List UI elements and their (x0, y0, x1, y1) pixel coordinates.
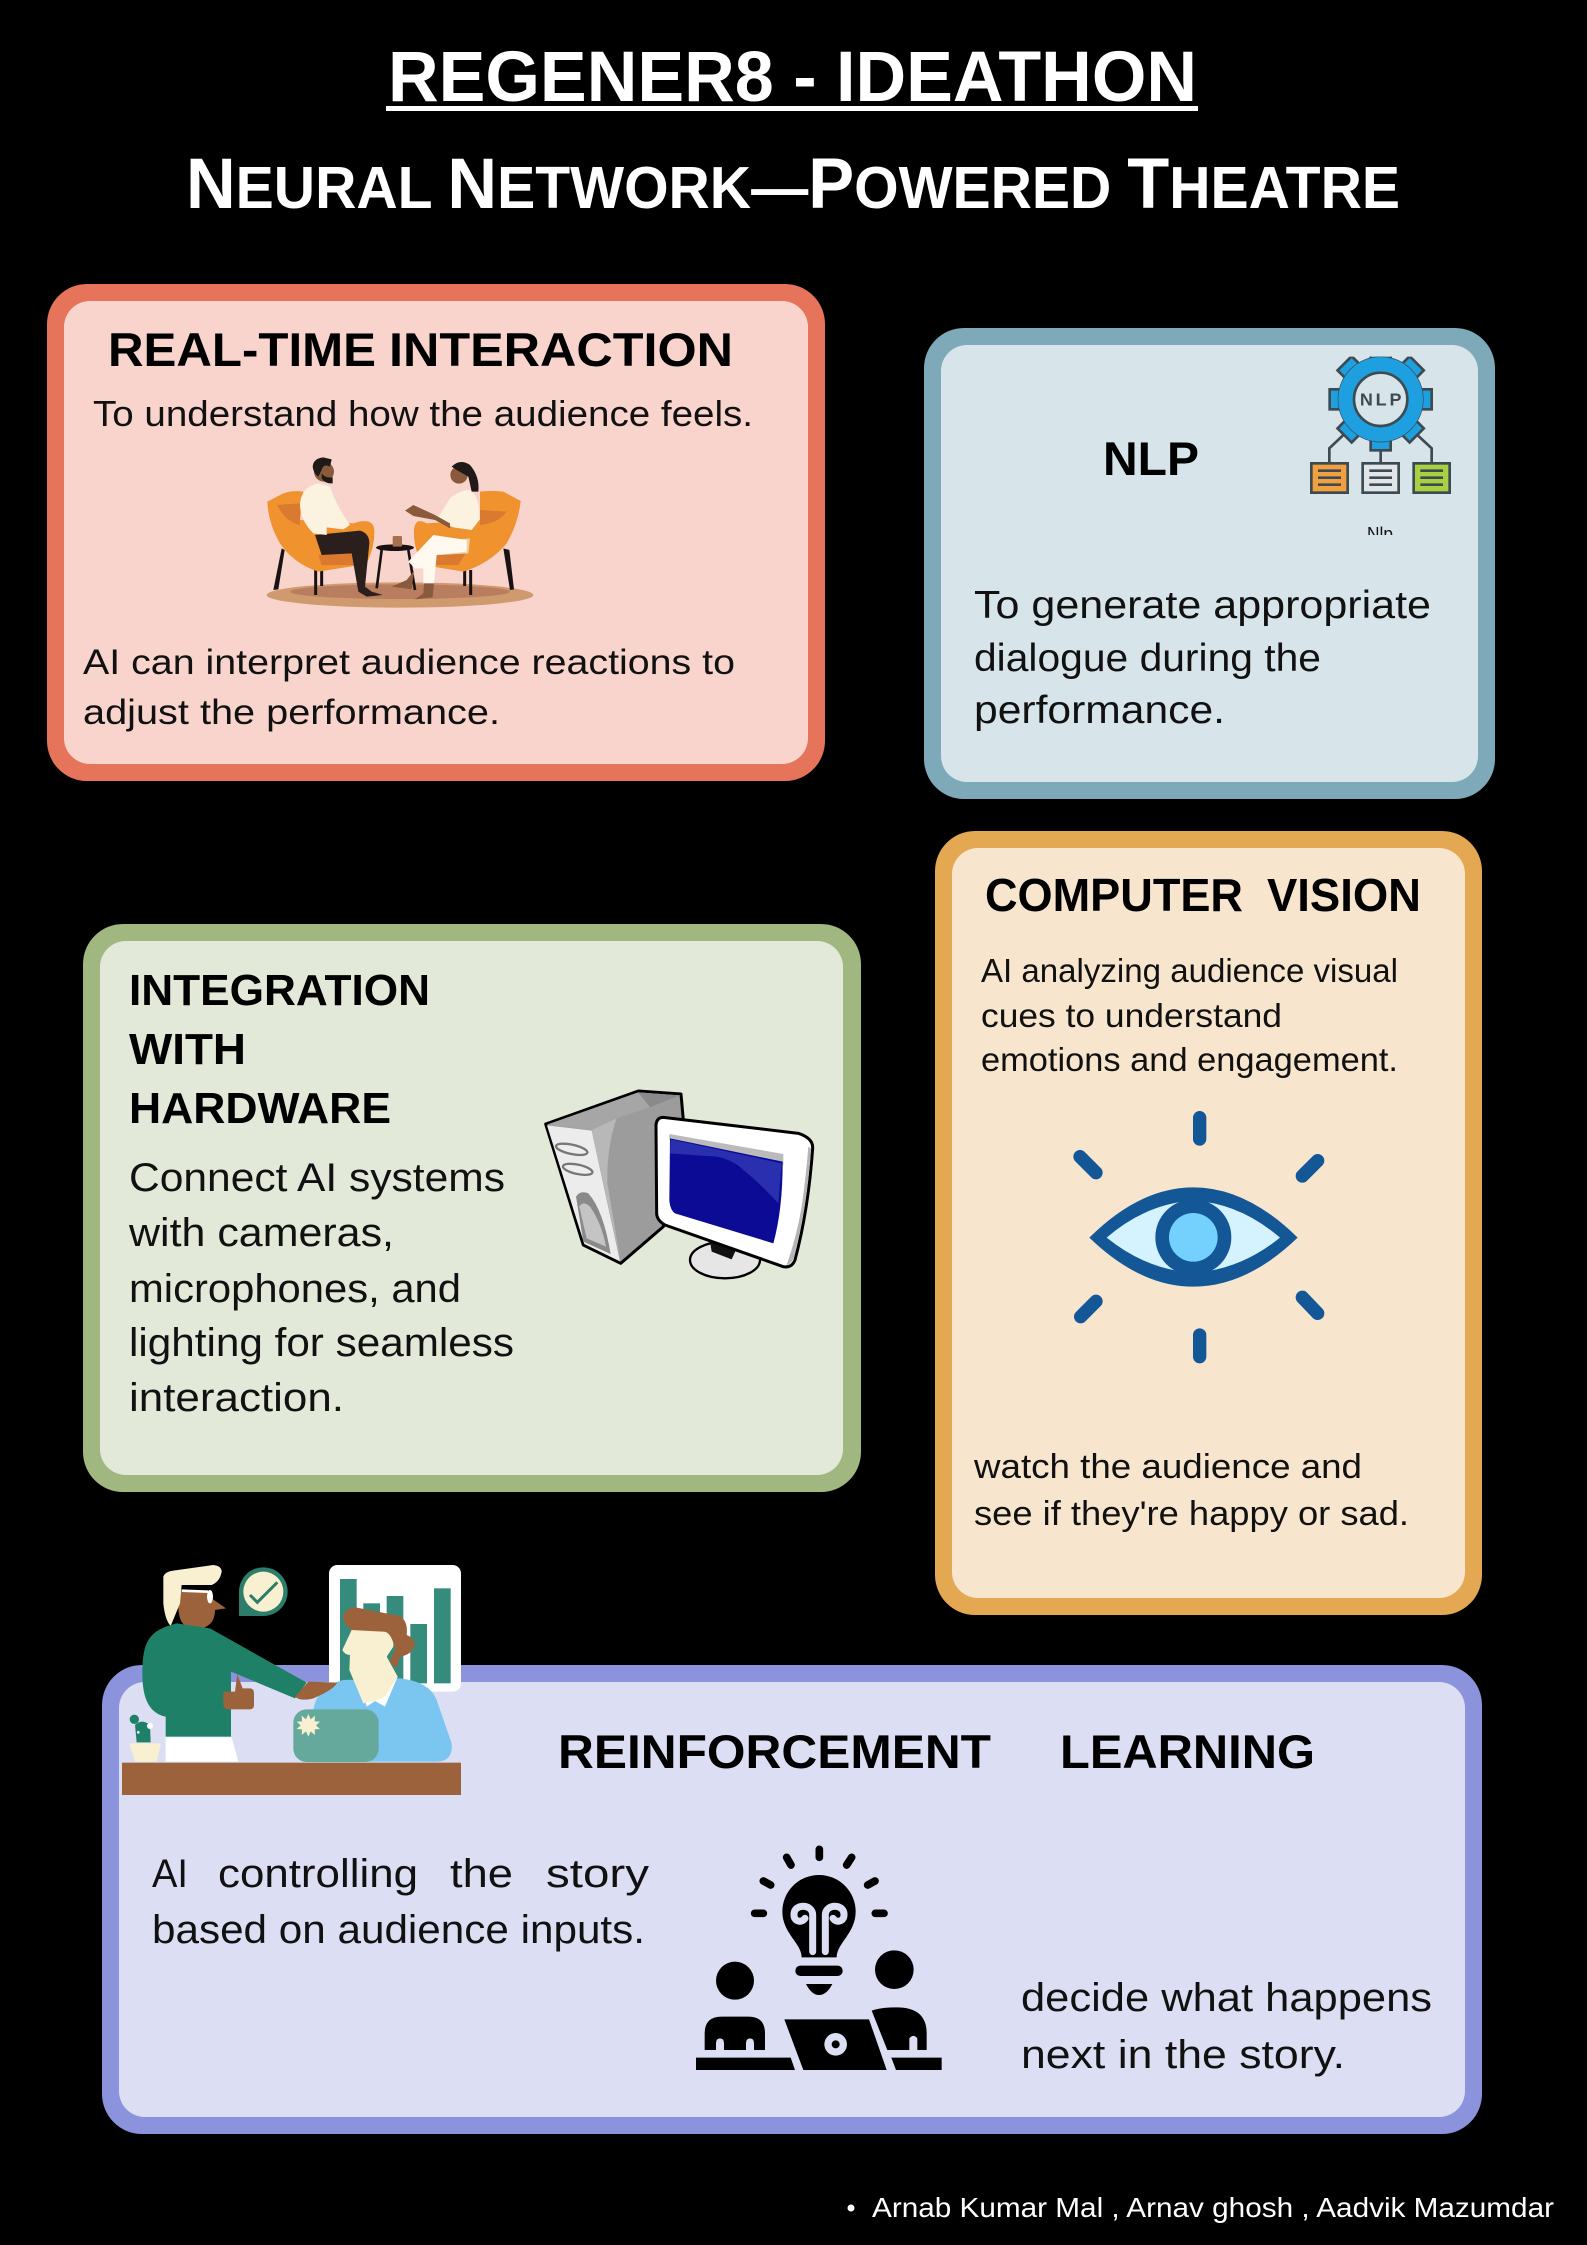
icon: lightbulb over team at laptop (696, 1849, 942, 2070)
text: hardware description: microphones, and (129, 1267, 461, 1311)
text: computer vision description: emotions and engagement. (981, 1041, 1398, 1078)
text: computer vision summary: watch the audience and (973, 1448, 1362, 1486)
illustration: two people talking (267, 457, 533, 608)
text: hardware description: interaction. (129, 1376, 344, 1420)
heading: reinforcement learning (558, 1725, 1315, 1778)
heading: real-time interaction: INTERACTION (389, 323, 733, 376)
icon: NLP gear (1311, 348, 1450, 493)
heading: real-time interaction: REAL-TIME (108, 323, 376, 376)
text: explanation: AI can interpret audience reactions to (83, 643, 735, 682)
heading: integration with hardware: WITH (129, 1025, 246, 1074)
panel: NLP (924, 328, 1495, 799)
text: explanation: adjust the performance. (83, 693, 500, 732)
text: purpose: To understand how the audience feels. (93, 393, 753, 434)
text: NLP description: performance. (974, 689, 1225, 732)
text: hardware description: Connect AI systems (129, 1156, 505, 1200)
icon: NLP gear: NLP (1360, 390, 1401, 410)
text: reinforcement description (152, 1852, 649, 1952)
text: reinforcement summary: decide what happens (1021, 1976, 1432, 2020)
heading: NLP: NLP (1103, 432, 1199, 485)
icon: eye (1080, 1118, 1318, 1357)
text: explanation (83, 643, 735, 732)
illustration: colleagues reviewing chart (122, 1565, 461, 1795)
panel: computer vision (935, 831, 1482, 1615)
panel: integration with hardware (83, 924, 861, 1492)
text: computer vision summary: see if they're happy or sad. (974, 1495, 1409, 1533)
text: computer vision description: cues to understand (981, 997, 1282, 1034)
heading: computer vision: VISION (1267, 869, 1421, 921)
icon: desktop computer (546, 1091, 813, 1278)
panel: real-time interaction (47, 284, 825, 781)
text: computer vision description (981, 952, 1398, 1078)
heading: computer vision: COMPUTER (985, 869, 1243, 921)
text: reinforcement summary: next in the story. (1021, 2033, 1345, 2077)
heading: reinforcement learning: REINFORCEMENT (558, 1725, 991, 1778)
heading: integration with hardware: INTEGRATION (129, 966, 430, 1015)
heading: integration with hardware (129, 966, 430, 1133)
heading: reinforcement learning: LEARNING (1060, 1725, 1315, 1778)
text: hardware description: with cameras, (128, 1211, 394, 1255)
footer: authors: Arnab Kumar Mal , Arnav ghosh , Aadvik Mazumdar (872, 2192, 1554, 2223)
text: reinforcement description: the (450, 1852, 513, 1896)
text: hardware description (128, 1156, 514, 1420)
text: reinforcement summary (1021, 1976, 1432, 2077)
text: reinforcement description: AI (152, 1852, 188, 1896)
title: REGENER8 - IDEATHON (388, 38, 1197, 117)
text: hardware description: lighting for seamless (129, 1321, 514, 1365)
text: computer vision description: AI analyzing audience visual (981, 952, 1398, 989)
text: reinforcement description: controlling (218, 1852, 418, 1896)
text: NLP description: To generate appropriate (974, 584, 1431, 627)
subtitle: NEURAL NETWORK—POWERED THEATRE (186, 145, 1400, 224)
heading: computer vision (985, 869, 1421, 921)
text: computer vision summary (973, 1448, 1409, 1533)
heading: real-time interaction (108, 323, 733, 376)
text: reinforcement description: based on audience inputs. (152, 1908, 645, 1952)
text: NLP description: dialogue during the (974, 637, 1321, 680)
text: reinforcement description: story (546, 1852, 649, 1896)
heading: integration with hardware: HARDWARE (129, 1084, 391, 1133)
text: NLP description (974, 584, 1431, 732)
panel: reinforcement learning (102, 1565, 1482, 2134)
